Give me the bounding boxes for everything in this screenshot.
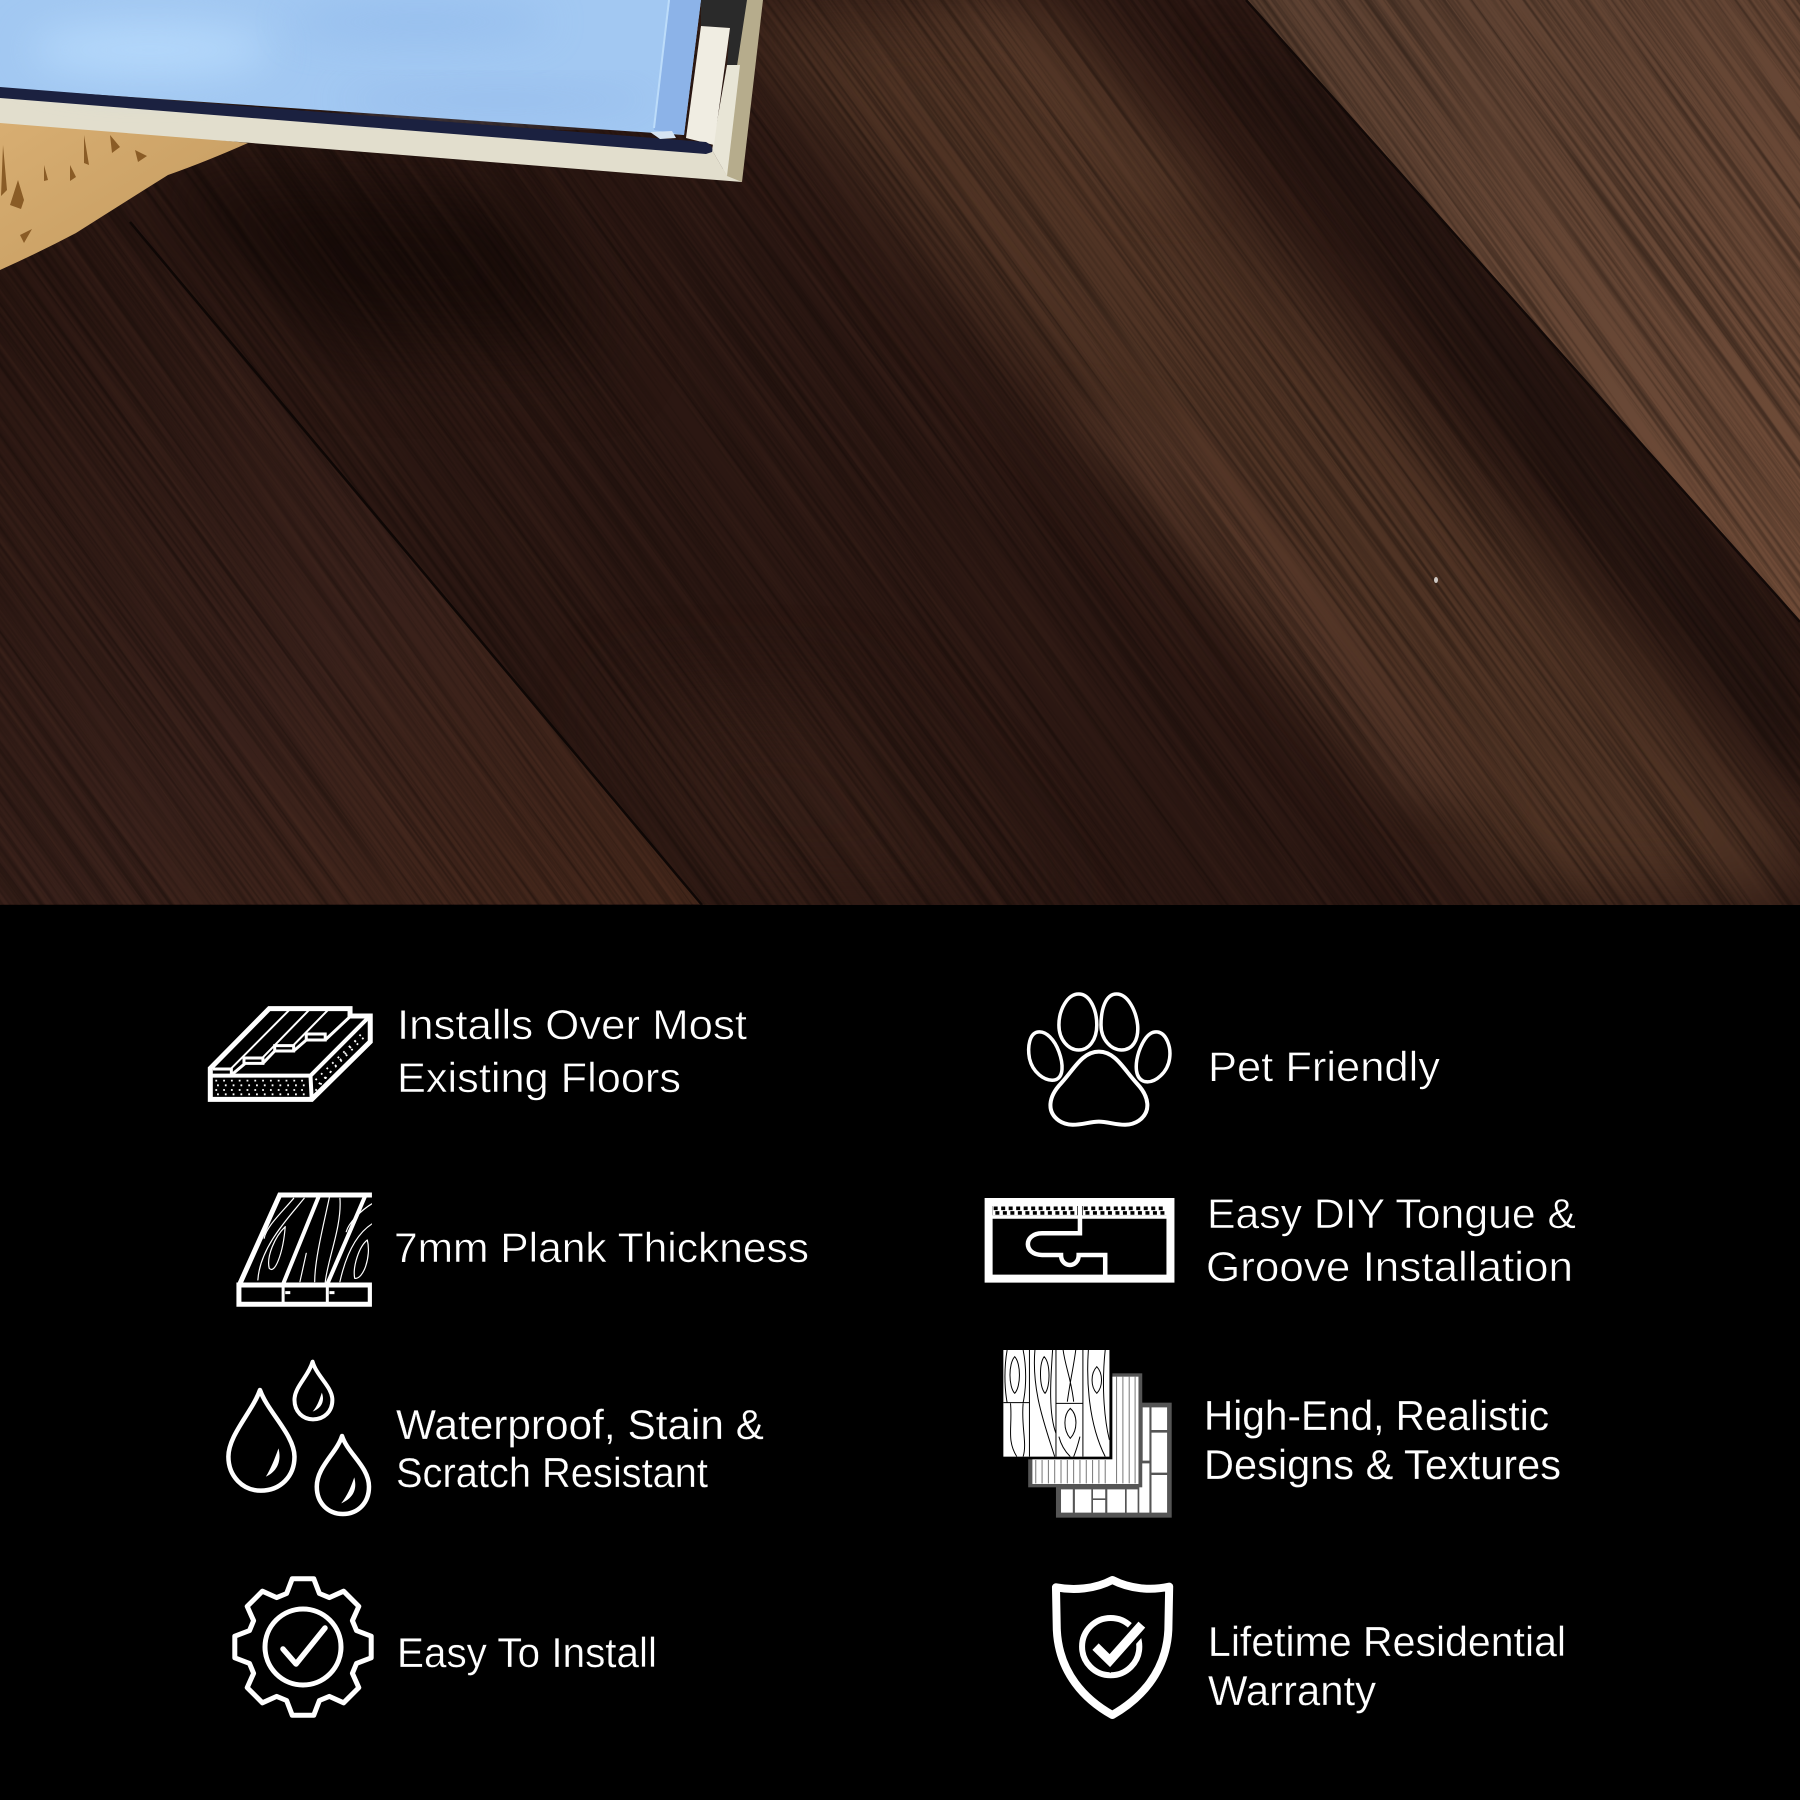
plank seam right xyxy=(1246,0,1800,622)
wood grain dark xyxy=(0,0,1800,905)
wood base xyxy=(0,0,1800,905)
text: easy diy tongue and groove installation xyxy=(1206,1190,1576,1290)
icon: paw print xyxy=(1029,994,1170,1125)
navy cover edge xyxy=(0,87,712,154)
text: pet friendly: Pet Friendly xyxy=(1208,1043,1440,1090)
feature: pet friendly xyxy=(1029,994,1440,1125)
feature: 7mm plank thickness xyxy=(239,1195,809,1305)
right plank xyxy=(1240,0,1800,640)
text: easy to install: Easy To Install xyxy=(397,1629,657,1676)
tan outer page edge xyxy=(722,0,763,182)
text: waterproof, stain and scratch resistant xyxy=(396,1401,764,1496)
text: waterproof, stain and scratch resistant: Scratch Resistant xyxy=(396,1449,708,1496)
text: high-end realistic designs and textures: Designs & Textures xyxy=(1204,1441,1561,1488)
icon: layered floor block xyxy=(209,1009,370,1100)
icon: tongue and groove joint xyxy=(989,1200,1170,1280)
text: lifetime residential warranty: Warranty xyxy=(1208,1667,1376,1714)
front swatch xyxy=(1003,1350,1112,1459)
back swatch xyxy=(1056,1403,1172,1518)
text: lifetime residential warranty: Lifetime Residential xyxy=(1208,1618,1566,1665)
blue cover shading xyxy=(30,4,660,110)
icon: stacked texture swatches xyxy=(1003,1350,1172,1518)
feature: lifetime residential warranty xyxy=(1056,1580,1566,1715)
blue cover xyxy=(0,0,701,135)
wood grain light xyxy=(0,0,1800,905)
feature: realistic designs and textures xyxy=(1003,1350,1561,1518)
feature: waterproof xyxy=(228,1362,764,1514)
book cover edge xyxy=(0,0,763,182)
icon: shield with check xyxy=(1056,1580,1169,1715)
corner tear xyxy=(650,131,676,139)
text: high-end realistic designs and textures xyxy=(1204,1392,1561,1488)
text: installs over most existing floors xyxy=(397,1001,747,1101)
left plank xyxy=(0,447,700,904)
middle swatch xyxy=(1028,1373,1142,1487)
text: easy diy tongue and groove installation: Easy DIY Tongue & xyxy=(1207,1190,1576,1237)
center plank tones xyxy=(130,0,1800,904)
photo: dark wood plank floor with book corner xyxy=(0,0,1800,905)
dark inner xyxy=(701,0,747,66)
fold highlight xyxy=(654,0,669,128)
feature: installs over most existing floors xyxy=(209,1001,747,1101)
speck xyxy=(1434,577,1438,583)
icon: wood plank xyxy=(239,1195,374,1305)
cream strip near xyxy=(686,26,730,145)
cream strip far xyxy=(712,65,740,176)
text: lifetime residential warranty xyxy=(1208,1618,1566,1714)
text: 7mm plank thickness: 7mm Plank Thickness xyxy=(394,1224,809,1271)
text: high-end realistic designs and textures: High-End, Realistic xyxy=(1204,1392,1549,1439)
cream page block xyxy=(0,96,742,182)
text: waterproof, stain and scratch resistant: Waterproof, Stain & xyxy=(396,1401,764,1448)
feature: tongue and groove installation xyxy=(989,1190,1576,1290)
feature: easy to install xyxy=(235,1579,657,1715)
text: easy diy tongue and groove installation: Groove Installation xyxy=(1206,1243,1573,1290)
blue spine fold xyxy=(654,0,701,135)
icon: gear with check xyxy=(235,1579,371,1715)
text: installs over most existing floors: Installs Over Most xyxy=(397,1001,747,1048)
icon: water drops xyxy=(228,1362,369,1514)
text: installs over most existing floors: Existing Floors xyxy=(397,1054,681,1101)
black features panel xyxy=(0,905,1800,1800)
plank seam left xyxy=(130,222,702,905)
cork object xyxy=(0,118,248,270)
